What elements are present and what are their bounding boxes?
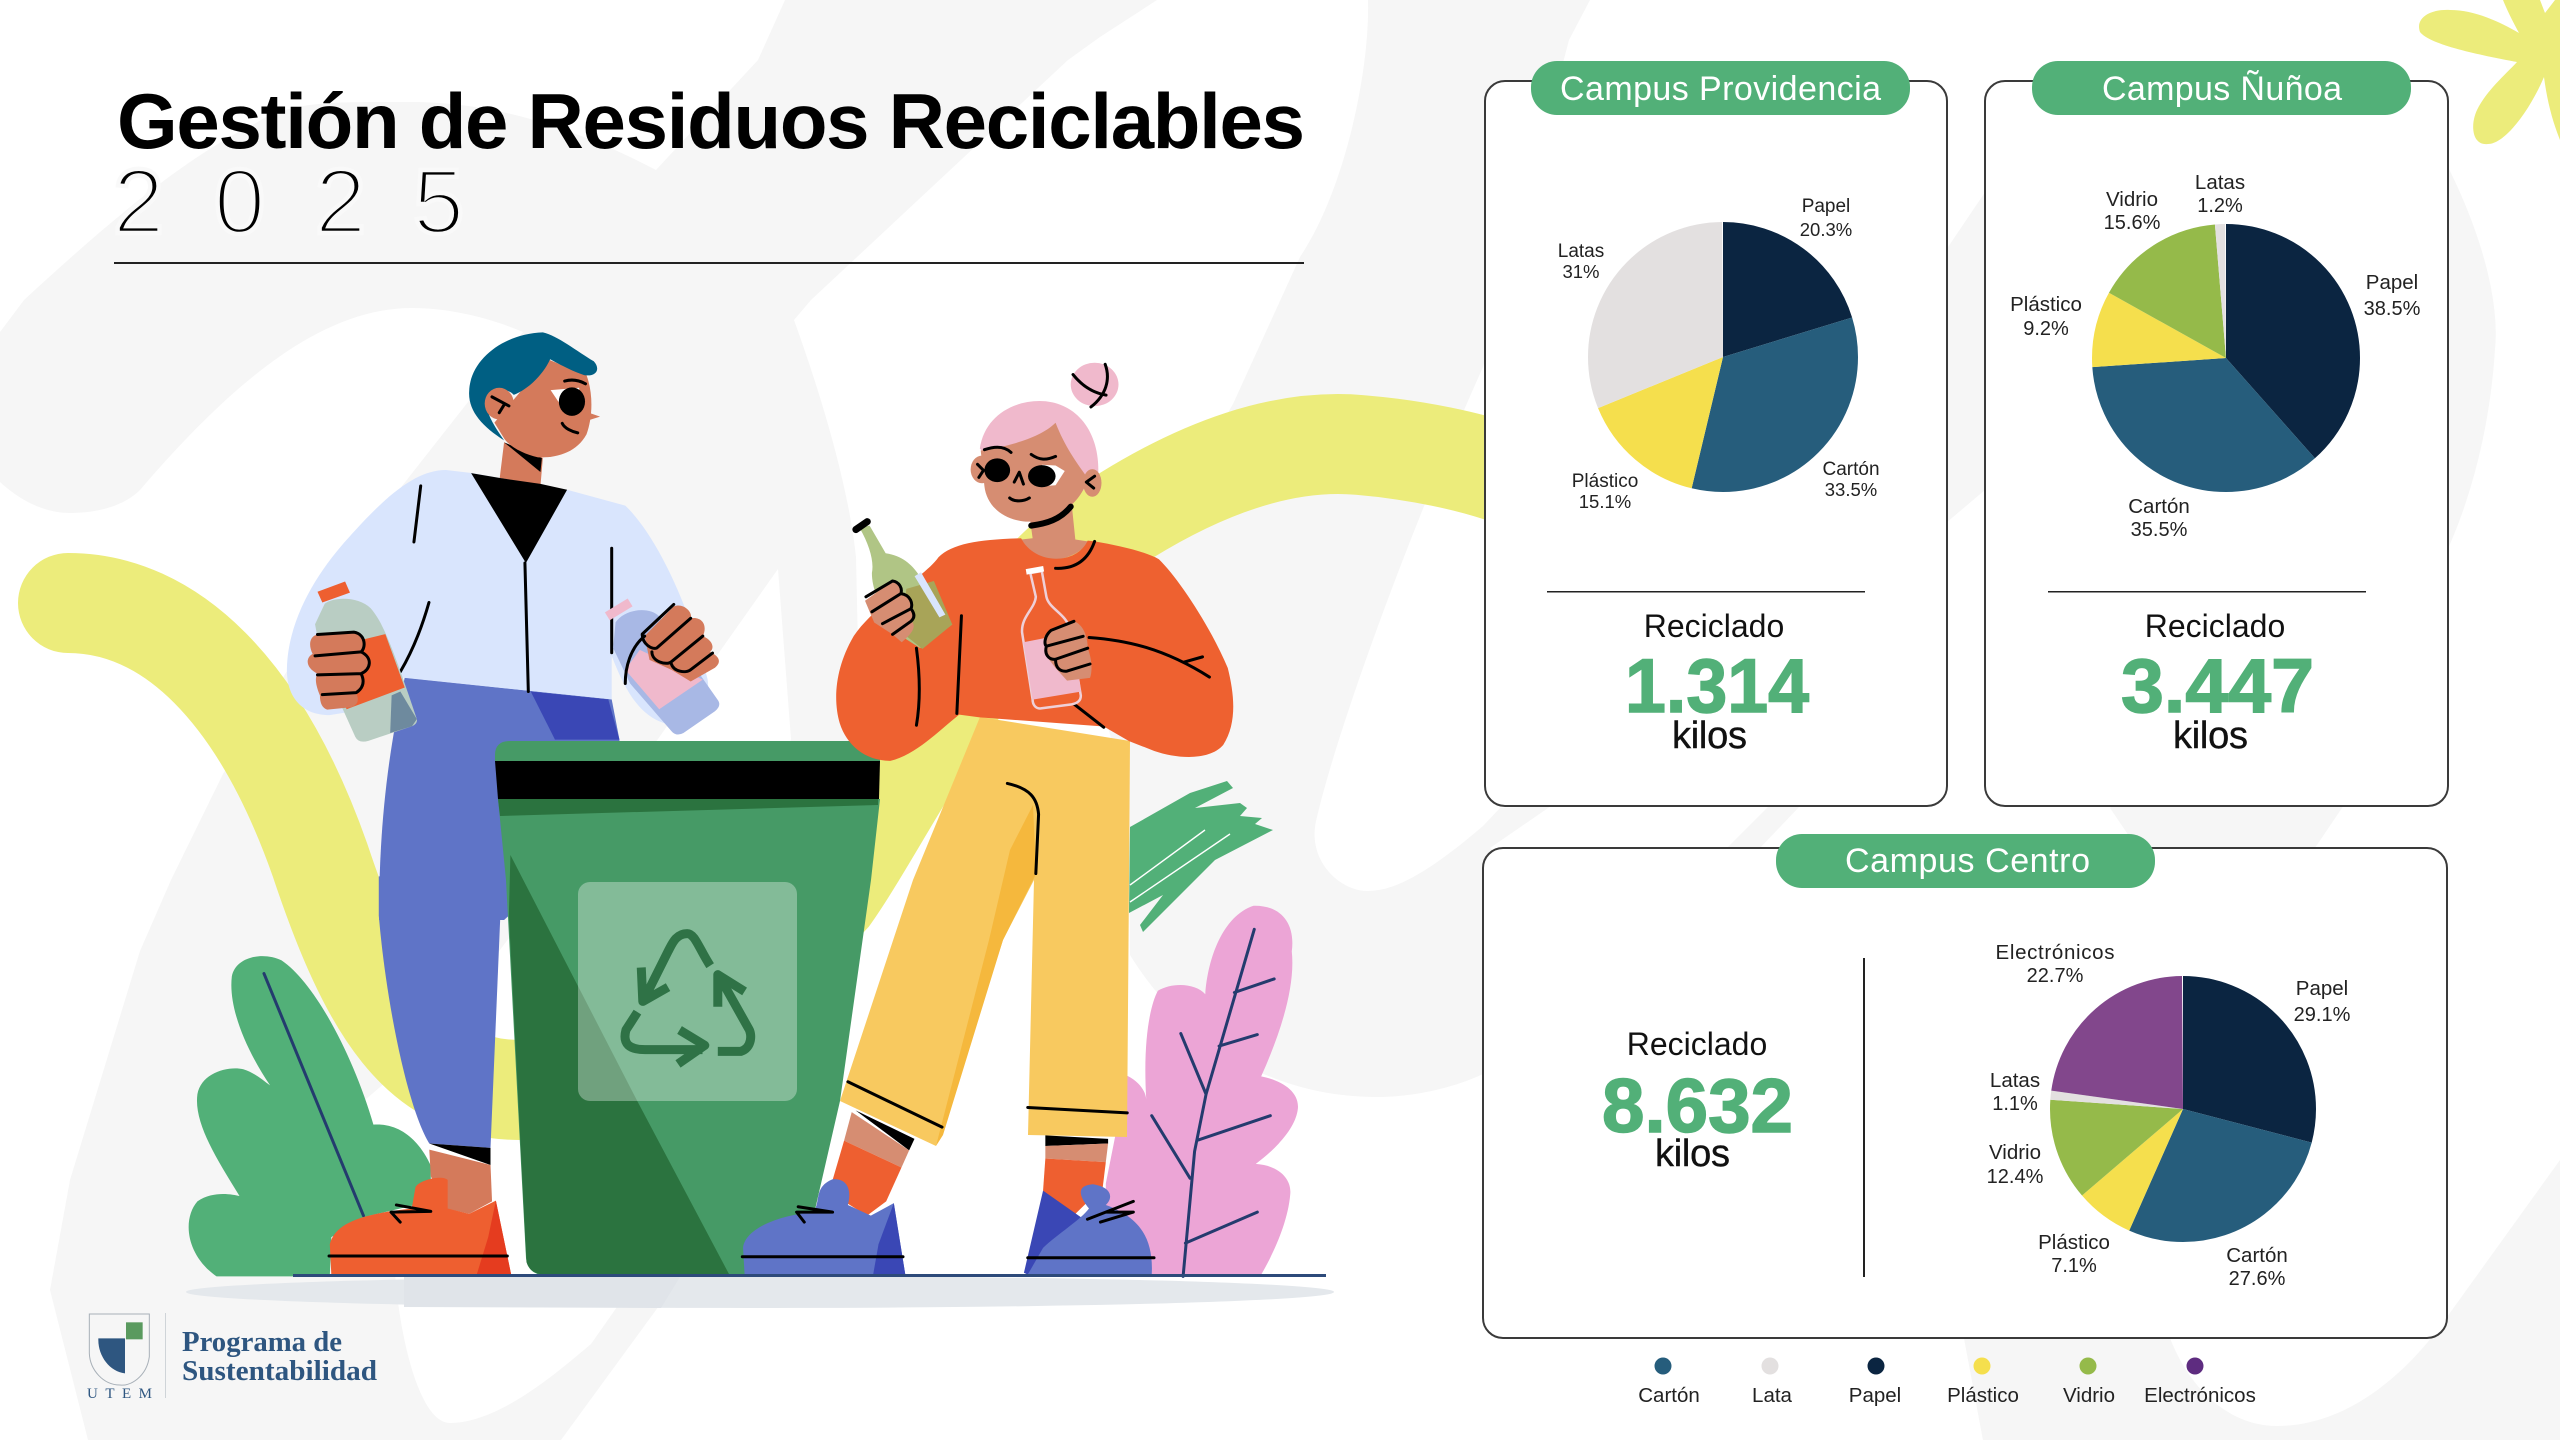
pie labels: 15.6% <box>2104 212 2161 234</box>
left trouser leg <box>379 876 502 1148</box>
pie labels: Latas <box>1990 1069 2040 1092</box>
icon: shield <box>89 1314 149 1385</box>
total: 1.314 <box>1625 644 1809 729</box>
pie labels: Plástico <box>2010 293 2082 316</box>
legend: Plástico <box>1947 1384 2019 1407</box>
header pill <box>1776 834 2155 888</box>
pie labels: Vidrio <box>1989 1141 2041 1164</box>
yellow ribbon swoosh <box>68 444 1500 1090</box>
glass bottle <box>1022 571 1081 708</box>
pie labels: Plástico <box>1572 471 1638 492</box>
pie labels: 38.5% <box>2364 298 2421 320</box>
pie labels: Vidrio <box>2106 188 2158 211</box>
total: 3.447 <box>2121 644 2314 729</box>
pie labels: Papel <box>1802 196 1850 217</box>
pie labels: 1.1% <box>1992 1093 2038 1115</box>
hair <box>980 401 1098 501</box>
pie chart <box>2159 291 2293 425</box>
sweater <box>836 538 1233 761</box>
hair bun <box>1071 363 1118 406</box>
icon: recycling symbol <box>625 934 751 1064</box>
year: 2 0 2 5 <box>113 151 464 253</box>
bin label plate <box>578 882 797 1101</box>
head <box>494 359 591 457</box>
brush strokes <box>1129 781 1273 932</box>
face <box>971 456 994 483</box>
pie labels: 1.2% <box>2197 195 2243 217</box>
bottle in right hand <box>613 610 719 735</box>
left sock and foot <box>429 1144 491 1165</box>
pie labels: 27.6% <box>2229 1268 2286 1290</box>
bottle in left hand <box>315 599 417 742</box>
pie chart <box>2116 1042 2250 1176</box>
total: 8.632 <box>1602 1064 1793 1149</box>
floor line <box>293 1274 1326 1277</box>
pie labels: 31% <box>1562 261 1600 282</box>
total: Reciclado <box>2145 608 2285 644</box>
back foot <box>1045 1135 1108 1146</box>
header pill <box>2032 61 2411 115</box>
pie labels: 22.7% <box>2027 965 2084 987</box>
pie labels <box>1558 196 1880 512</box>
total <box>1602 1026 1793 1175</box>
left trousers <box>379 678 619 920</box>
total <box>2121 608 2314 757</box>
pie labels: 9.2% <box>2023 318 2069 340</box>
ground shadow <box>186 1276 1334 1308</box>
pie labels: Cartón <box>2226 1244 2288 1267</box>
pie labels: Latas <box>1558 241 1604 262</box>
yellow trousers <box>840 717 1130 1146</box>
total <box>1625 608 1809 757</box>
legend: Vidrio <box>2063 1384 2115 1407</box>
pie labels: Cartón <box>1822 459 1880 480</box>
title: Gestión de Residuos Reciclables <box>117 77 1305 165</box>
panel: Campus Providencia <box>1485 61 1947 806</box>
logo: UTEM Programa de Sustentabilidad: Programa de <box>182 1327 342 1358</box>
pie labels: Papel <box>2296 977 2348 1000</box>
panel: Campus Providencia: Campus Providencia <box>1560 70 1881 108</box>
front foot <box>856 1110 914 1150</box>
recycling bin <box>495 741 880 1275</box>
orange shoe <box>330 1178 511 1275</box>
legend: Cartón <box>1638 1384 1700 1407</box>
green bottle <box>859 526 952 648</box>
pie labels: Latas <box>2195 171 2245 194</box>
pie labels: Cartón <box>2128 495 2190 518</box>
title rule <box>114 262 1304 264</box>
logo: UTEM Programa de Sustentabilidad: UTEM <box>87 1386 152 1402</box>
pie labels: 7.1% <box>2051 1255 2097 1277</box>
plant: green <box>189 956 431 1276</box>
logo: UTEM Programa de Sustentabilidad: Sustentabilidad <box>182 1356 377 1387</box>
panel: Campus Ñuñoa: Campus Ñuñoa <box>2102 70 2342 108</box>
legend <box>1638 1358 2256 1407</box>
yellow flower <box>2419 0 2560 144</box>
pie labels <box>2010 171 2421 541</box>
plant: pink <box>1106 906 1298 1276</box>
legend: Papel <box>1849 1384 1901 1407</box>
pie labels: 12.4% <box>1987 1166 2044 1188</box>
logo: UTEM Programa de Sustentabilidad <box>87 1313 377 1402</box>
panel: Campus Centro <box>1483 834 2447 1338</box>
neck <box>1021 504 1088 560</box>
total: kilos <box>2173 715 2248 757</box>
shirt <box>287 470 708 724</box>
pie chart <box>1656 290 1790 424</box>
pie labels: 35.5% <box>2131 519 2188 541</box>
header pill <box>1531 61 1910 115</box>
legend: Lata <box>1752 1384 1793 1407</box>
panel: Campus Ñuñoa <box>1985 61 2448 806</box>
legend: Electrónicos <box>2144 1384 2256 1407</box>
panel: Campus Centro: Campus Centro <box>1845 842 2090 880</box>
person left <box>287 332 719 1275</box>
pie labels: 20.3% <box>1800 219 1852 240</box>
person right <box>742 363 1233 1275</box>
pie labels: Plástico <box>2038 1231 2110 1254</box>
total: kilos <box>1672 715 1747 757</box>
pie labels: Papel <box>2366 271 2418 294</box>
neck <box>499 442 543 486</box>
pie labels: Electrónicos <box>1996 941 2114 964</box>
pie labels: 29.1% <box>2294 1004 2351 1026</box>
total: kilos <box>1655 1133 1730 1175</box>
pie labels <box>1987 941 2351 1290</box>
total: Reciclado <box>1627 1026 1767 1062</box>
pie labels: 15.1% <box>1579 491 1631 512</box>
total: Reciclado <box>1644 608 1784 644</box>
pie labels: 33.5% <box>1825 479 1877 500</box>
